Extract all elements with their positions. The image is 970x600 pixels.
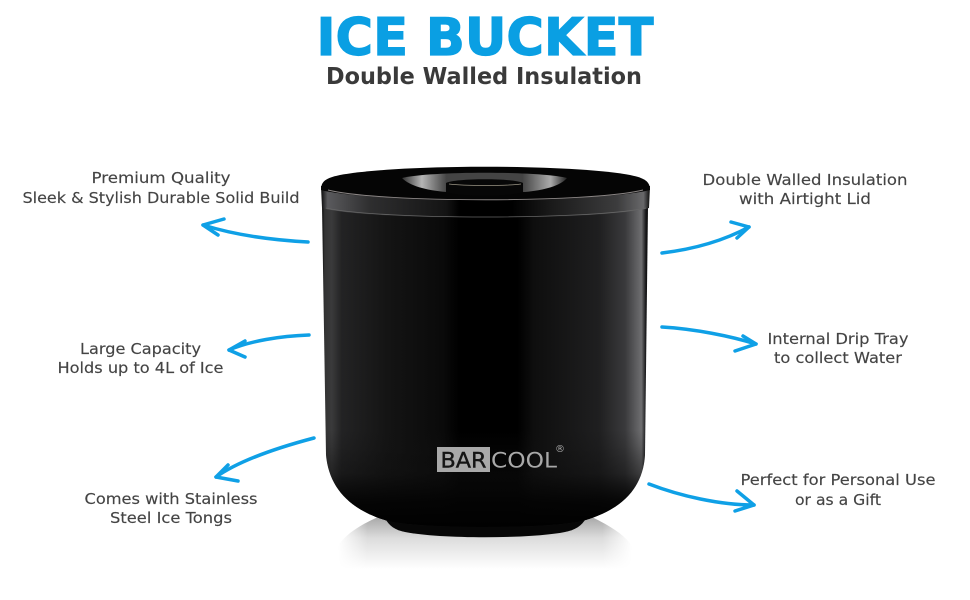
bucket base shading — [326, 445, 645, 527]
lid side — [321, 186, 650, 218]
logo registered mark: ® — [555, 444, 565, 455]
arrow: premium quality — [203, 219, 308, 242]
lid top — [321, 167, 650, 200]
side sheen fade — [326, 430, 645, 527]
lid knob — [446, 179, 523, 196]
label: ice tongs: Comes with Stainless — [84, 490, 258, 508]
label: personal use: or as a Gift — [795, 491, 881, 509]
label: double walled: Double Walled Insulation — [702, 171, 908, 189]
arrow: large capacity — [229, 335, 309, 357]
ice bucket product — [321, 167, 650, 569]
title: ICE BUCKET — [316, 8, 654, 68]
lid highlight edge — [328, 190, 643, 200]
bucket foot — [385, 518, 586, 537]
logo — [437, 444, 565, 472]
label: double walled: with Airtight Lid — [739, 190, 871, 208]
arrow: personal use — [649, 484, 754, 511]
subtitle: Double Walled Insulation — [326, 62, 642, 90]
label: premium quality: Sleek & Stylish Durable Solid Build — [22, 189, 300, 207]
label: large capacity: Large Capacity — [80, 340, 201, 358]
lid seam — [326, 208, 646, 217]
label: drip tray: to collect Water — [774, 349, 903, 367]
label: ice tongs: Steel Ice Tongs — [110, 509, 232, 527]
logo COOL: COOL — [491, 448, 557, 472]
arrow: double walled — [662, 222, 749, 253]
lid dome — [402, 173, 567, 192]
bucket body — [322, 205, 648, 527]
label: premium quality: Premium Quality — [92, 169, 230, 187]
logo box — [437, 447, 490, 472]
label: personal use: Perfect for Personal Use — [740, 471, 936, 489]
label: large capacity: Holds up to 4L of Ice — [58, 359, 224, 377]
reflection under bucket — [345, 518, 624, 562]
label: drip tray: Internal Drip Tray — [768, 330, 908, 348]
arrow: drip tray — [662, 327, 756, 351]
logo BAR: BAR — [440, 448, 486, 472]
arrow: ice tongs — [216, 438, 314, 481]
knob highlight — [449, 184, 521, 186]
